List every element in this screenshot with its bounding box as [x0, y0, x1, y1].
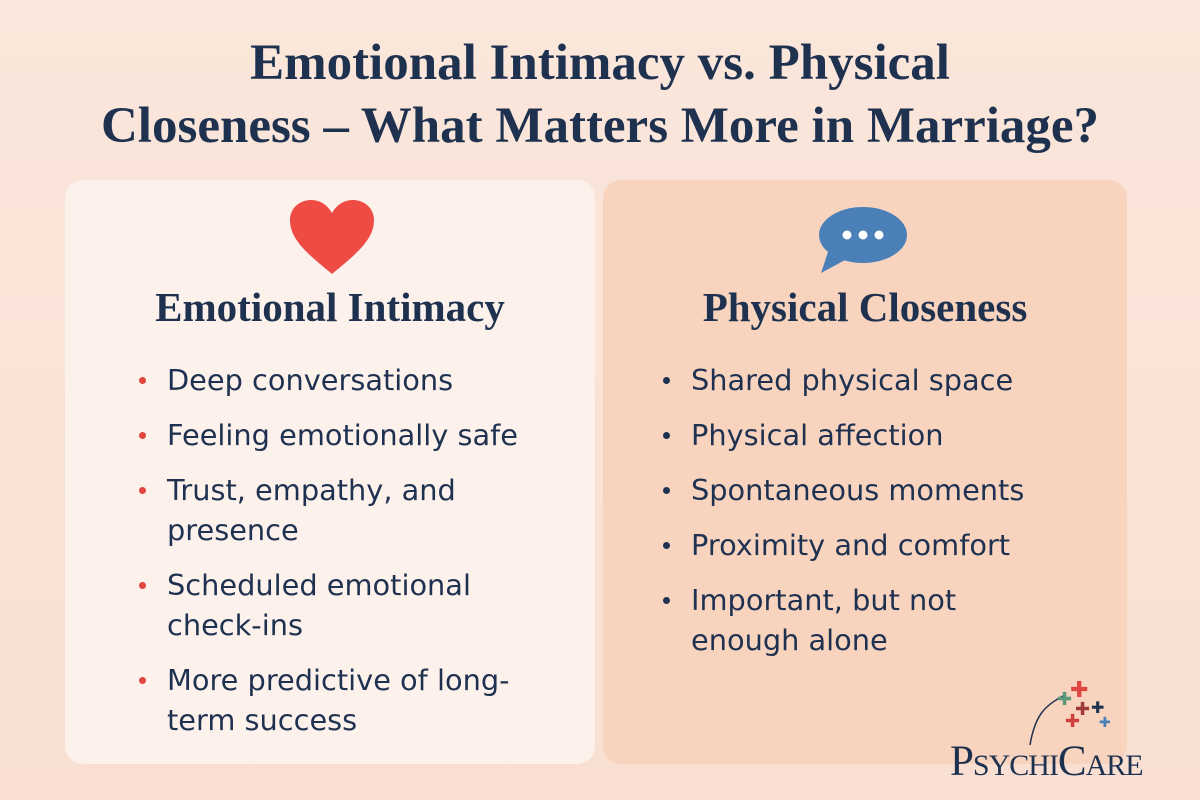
bullet list: Important, but not	[691, 583, 956, 617]
bullet list: check-ins	[167, 608, 303, 642]
icon: speech bubble	[819, 207, 907, 273]
heading: Physical Closeness	[703, 284, 1027, 330]
panel: physical closeness	[603, 180, 1127, 764]
bullet list: Deep conversations	[167, 363, 453, 397]
bullet list	[663, 363, 1024, 657]
bullet list: Physical affection	[691, 418, 944, 452]
icon: logo crosses: ✚	[1065, 711, 1080, 731]
icon: logo crosses: ✚	[1099, 714, 1111, 730]
bullet list: Trust, empathy, and	[167, 473, 456, 507]
title: Closeness – What Matters More in Marriage?	[101, 98, 1099, 154]
bullet list: term success	[167, 703, 357, 737]
bullet list: Shared physical space	[691, 363, 1013, 397]
bullet list: Scheduled emotional	[167, 568, 471, 602]
logo: PsychiCare	[950, 677, 1143, 785]
bullet list: Spontaneous moments	[691, 473, 1024, 507]
bullet list: More predictive of long-	[167, 663, 510, 697]
bullet list: Proximity and comfort	[691, 528, 1010, 562]
icon: logo crosses: ✚	[1091, 700, 1104, 717]
icon: logo crosses: ✚	[1057, 689, 1072, 709]
bullet list	[139, 363, 518, 737]
icon: logo crosses	[1029, 677, 1111, 745]
bullet list: enough alone	[691, 623, 888, 657]
icon: logo crosses: ✚	[1075, 699, 1090, 719]
bullet list: Feeling emotionally safe	[167, 418, 518, 452]
logo text: PsychiCare	[950, 738, 1143, 785]
heading: Emotional Intimacy	[155, 284, 505, 330]
icon: logo crosses: ✚	[1070, 677, 1088, 702]
panel: emotional intimacy	[65, 180, 595, 764]
title: Emotional Intimacy vs. Physical	[250, 35, 950, 91]
title	[101, 35, 1099, 154]
bullet list: presence	[167, 513, 299, 547]
icon: heart	[290, 200, 374, 274]
